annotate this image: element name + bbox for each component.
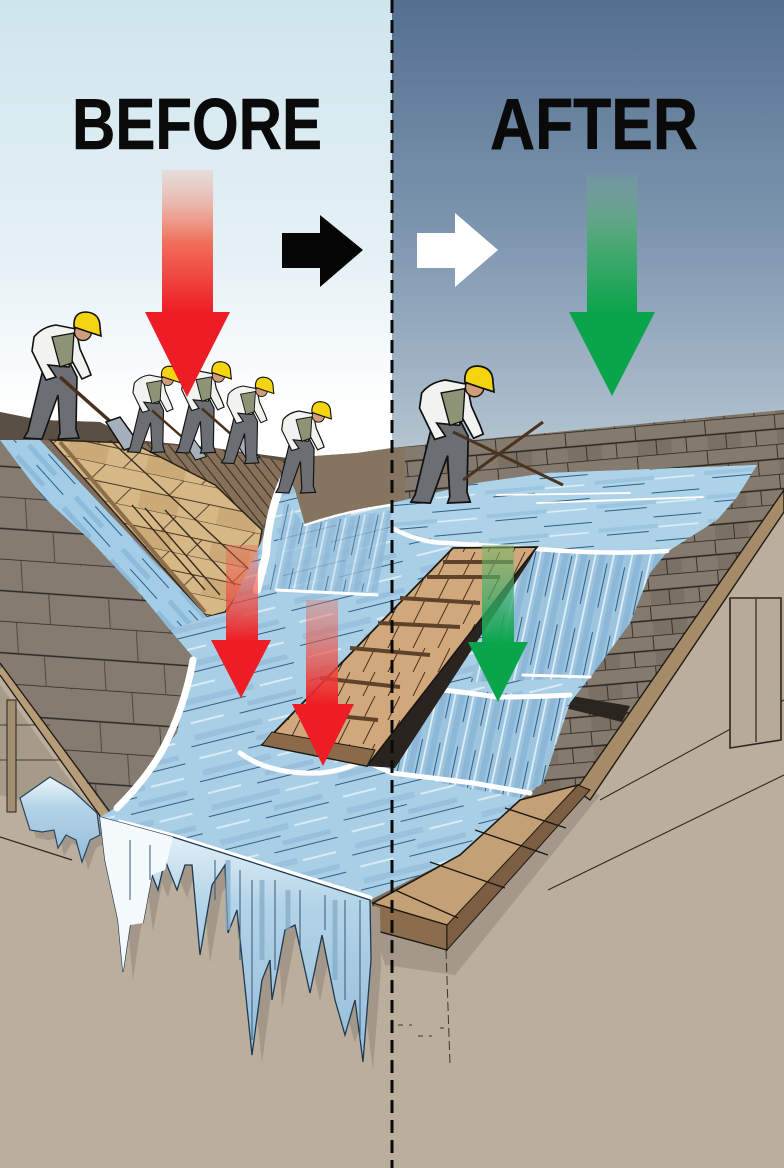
title: before: BEFORE <box>72 85 322 165</box>
house wall <box>0 480 784 1168</box>
icicles: main curtain <box>100 817 371 1062</box>
wood deck: exposed left <box>50 440 262 617</box>
roof: gutter shadow <box>565 696 630 722</box>
water sheet <box>0 440 757 900</box>
sky: after side <box>392 0 784 480</box>
water: centre fall <box>270 500 392 592</box>
water: left strip <box>0 440 207 630</box>
arrow: black right <box>282 215 363 287</box>
roof: base <box>0 410 784 903</box>
wood deck: exposed centre <box>262 547 537 768</box>
left gable below roof <box>0 663 110 860</box>
arrow: small green <box>468 545 528 702</box>
arrow: small red one <box>211 545 271 698</box>
worker 4 <box>221 377 274 464</box>
worker after <box>411 366 494 503</box>
roof: right shingles <box>392 410 784 797</box>
roof: right fascia board <box>576 490 784 800</box>
arrow: small red two <box>292 600 354 766</box>
icicles: small ledge <box>20 777 100 862</box>
roof: brown shingles around worker five <box>287 447 405 523</box>
title: after: AFTER <box>490 85 698 165</box>
water: lower fall <box>385 687 570 798</box>
wood deck: brown boards <box>133 443 287 530</box>
water: upper fall <box>470 548 667 682</box>
workers <box>24 312 331 493</box>
roof: dark ridge left <box>0 412 300 530</box>
worker 1 <box>24 312 140 450</box>
arrow: big green down <box>569 175 655 396</box>
window <box>730 598 781 748</box>
icicle shadows <box>26 785 381 1070</box>
sky: before side <box>0 0 392 480</box>
arrow: big red down <box>145 170 230 397</box>
worker 5 <box>276 402 331 493</box>
worker 2 <box>127 366 206 460</box>
after scraper poles <box>453 422 563 485</box>
right wall with window <box>374 598 784 1065</box>
arrow: white right <box>417 213 498 287</box>
worker 3 <box>176 362 259 461</box>
water: upper sheet <box>390 465 757 552</box>
wood eave: bottom right <box>373 785 590 950</box>
roof: left shingles <box>0 440 193 815</box>
white water crests <box>117 472 703 898</box>
dashed divider <box>390 0 394 1168</box>
